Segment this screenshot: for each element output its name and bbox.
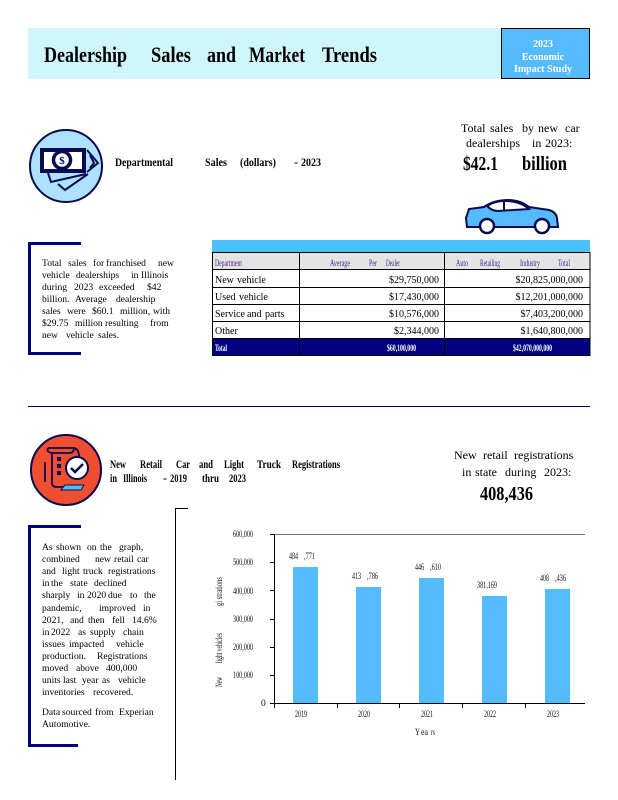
text: sales summary: Total (42, 258, 62, 269)
heading: registrations: New (110, 457, 126, 471)
text: registrations summary: retail (114, 554, 134, 565)
table rows: $2,344,000 (394, 326, 439, 337)
table header: Industry (520, 258, 540, 268)
heading: departmental sales: Sales (205, 155, 227, 169)
badge: 2023 Economic Impact Study (502, 28, 590, 78)
x axis labels: 2019 (295, 710, 307, 720)
x axis title: rs (431, 728, 435, 738)
y axis title: New (215, 677, 225, 687)
text: sales summary: exceeded (99, 282, 135, 293)
text: sales summary: vehicle (42, 270, 70, 281)
data labels: 484 (289, 552, 298, 562)
data labels: ,786 (367, 572, 378, 582)
table total row: Total (215, 343, 227, 353)
callout: new retail registrations (454, 448, 574, 505)
text: sales summary: billion. (42, 294, 69, 305)
text: sales summary: dealership (116, 294, 156, 305)
y axis title (215, 577, 225, 687)
text: registrations summary: impacted (69, 639, 104, 650)
data labels: 413 (352, 572, 361, 582)
text: registrations summary: chain (123, 627, 144, 638)
text: registrations summary: recovered. (93, 687, 133, 698)
table rows: Used (215, 292, 236, 303)
x axis title (415, 728, 435, 738)
text: registrations summary: on (87, 542, 97, 553)
y axis labels: 500,000 (233, 558, 253, 568)
header band (28, 28, 501, 79)
heading: registrations (110, 457, 340, 485)
title: Trends (322, 42, 377, 67)
text: sales summary: sales (68, 258, 87, 269)
table rows: $29,750,000 (389, 275, 439, 286)
callout: total sales: in (532, 136, 541, 150)
text: registrations summary: due (108, 590, 122, 601)
table total row: $42,070,000,000 (513, 343, 552, 353)
heading: departmental sales: - (294, 155, 298, 169)
text: registrations summary: improved (99, 603, 136, 614)
text: registrations summary: new (95, 554, 111, 565)
text: sales summary: Illinois (141, 270, 168, 281)
text: sales summary: $60.1 (92, 306, 114, 317)
text: registrations summary: Experian (119, 707, 154, 718)
text: registrations summary: fell (112, 615, 125, 626)
text: registrations summary: in (42, 627, 50, 638)
text: registrations summary: pandemic, (42, 603, 82, 614)
text: registrations summary: inventories (42, 687, 85, 698)
text: sales summary: million (75, 318, 103, 329)
callout: total sales: 2023: (545, 136, 572, 150)
data labels: ,436 (555, 574, 566, 584)
bracket: sales text (30, 244, 81, 354)
text: registrations summary: 2022 (51, 627, 70, 638)
heading: registrations: Retail (140, 457, 162, 471)
table header: Retailing (480, 258, 500, 268)
table rows: New (215, 275, 235, 286)
y axis labels: 400,000 (233, 587, 253, 597)
icon: registration document (31, 435, 101, 505)
text: sales summary: for (93, 258, 105, 269)
table rows: parts (265, 309, 285, 320)
badge: 2023 Economic Impact Study: Economic (522, 52, 565, 63)
y axis labels: 600,000 (233, 530, 253, 540)
text: sales summary: franchised (106, 258, 146, 269)
text: sales summary: sales (42, 306, 61, 317)
table rows (215, 275, 583, 337)
icon: money: $ (59, 155, 65, 167)
heading: registrations: Registrations (292, 457, 340, 471)
bracket: registrations text (30, 526, 81, 746)
text: registrations summary: in (143, 603, 151, 614)
data labels: 446 (415, 563, 424, 573)
callout: total sales: $42.1 (463, 153, 498, 175)
table total row: $60,100,000 (387, 343, 416, 353)
text: registrations summary: Data (42, 707, 61, 718)
callout: new retail registrations: registrations (514, 448, 574, 462)
text: registrations summary: 400,000 (106, 663, 137, 674)
text: registrations summary: issues (42, 639, 65, 650)
text: registrations summary: Registrations (97, 651, 148, 662)
text: registrations summary: As (42, 542, 53, 553)
text: registrations summary: truck (83, 566, 103, 577)
callout: total sales: sales (490, 121, 514, 135)
table rows: vehicle (239, 292, 268, 303)
text: sales summary: Average (75, 294, 107, 305)
text: registrations summary: then (88, 615, 105, 626)
text: registrations summary: declined (94, 578, 127, 589)
text: registrations summary: above (76, 663, 99, 674)
text: registrations summary: supply (90, 627, 116, 638)
text: registrations summary: production. (42, 651, 86, 662)
text: registrations summary: the (100, 542, 112, 553)
callout: total sales: by (522, 121, 534, 135)
text: registrations summary: sharply (42, 590, 70, 601)
heading: departmental sales: 2023 (301, 155, 321, 169)
y axis title: light vehicles (215, 633, 225, 663)
table header: Auto (456, 258, 468, 268)
text: sales summary: resulting (105, 318, 139, 329)
text: registrations summary: the (51, 578, 63, 589)
title: and (207, 42, 236, 67)
table rows: $20,825,000,000 (516, 275, 583, 286)
title (44, 42, 377, 67)
callout: new retail registrations: state (475, 465, 497, 479)
data labels: ,610 (430, 563, 441, 573)
text: registrations summary: units (42, 675, 61, 686)
text: sales summary: dealerships (76, 270, 119, 281)
heading: departmental sales (115, 155, 321, 169)
text: sales summary: from (150, 318, 169, 329)
y axis labels: 0 (261, 699, 266, 709)
text: registrations summary: light (62, 566, 80, 577)
text: registrations summary: 2021, (42, 615, 64, 626)
callout: total sales: Total (461, 121, 486, 135)
icon: money (30, 130, 102, 202)
text: registrations summary: 2020 (87, 590, 106, 601)
text: registrations summary: registrations (108, 566, 156, 577)
text: sales summary: vehicle (66, 330, 94, 341)
heading: registrations: Illinois (123, 471, 147, 485)
text: registrations summary: in (42, 578, 50, 589)
callout: total sales: car (565, 121, 580, 135)
callout: total sales (461, 121, 580, 175)
text: sales summary: in (131, 270, 139, 281)
title: Market (249, 42, 306, 67)
table: departmental sales (212, 240, 590, 356)
table rows: $10,576,000 (389, 309, 439, 320)
text: registrations summary: year (82, 675, 99, 686)
text: registrations summary: 14.6% (132, 615, 157, 626)
x axis labels: 2022 (484, 710, 496, 720)
text: sales summary: $42 (147, 282, 162, 293)
x axis labels: 2021 (421, 710, 433, 720)
table rows: $17,430,000 (389, 292, 439, 303)
x axis title: Y (415, 728, 420, 738)
text: sales summary (42, 258, 174, 341)
x axis title: ea (421, 728, 429, 738)
heading: registrations: Car (176, 457, 190, 471)
text: registrations summary: car (137, 554, 150, 565)
text: registrations summary: state (70, 578, 88, 589)
table rows: $1,640,800,000 (520, 326, 583, 337)
title: Sales (151, 42, 191, 67)
table total row (215, 343, 552, 353)
y axis labels: 100,000 (233, 671, 253, 681)
heading: registrations: in (110, 471, 117, 485)
icon: car (466, 200, 558, 233)
callout: total sales: new (538, 121, 558, 135)
table header: Average (330, 258, 350, 268)
text: registrations summary: from (95, 707, 114, 718)
text: registrations summary: sourced (62, 707, 92, 718)
text: sales summary: during (42, 282, 67, 293)
text: sales summary: sales. (98, 330, 119, 341)
x axis labels (295, 710, 559, 720)
data labels: 408 (540, 574, 549, 584)
y axis labels: 300,000 (233, 615, 253, 625)
callout: new retail registrations: during (505, 465, 536, 479)
callout: total sales: billion (522, 153, 567, 175)
x axis labels: 2020 (358, 710, 370, 720)
table header: Total (558, 258, 570, 268)
table rows: vehicle (237, 275, 266, 286)
heading: registrations: thru (202, 471, 219, 485)
text: sales summary: 2023 (74, 282, 93, 293)
table header: Department (215, 258, 242, 268)
text: registrations summary: last (63, 675, 77, 686)
callout: new retail registrations: retail (483, 448, 508, 462)
table header: Per (369, 258, 377, 268)
x axis labels: 2023 (547, 710, 559, 720)
callout: new retail registrations: 2023: (544, 465, 571, 479)
heading: departmental sales: (dollars) (240, 155, 276, 169)
table rows: Service (215, 309, 246, 320)
badge: 2023 Economic Impact Study: 2023 (533, 39, 553, 50)
text: registrations summary: to (130, 590, 138, 601)
text: registrations summary: moved (42, 663, 68, 674)
data labels: ,771 (304, 552, 315, 562)
text: registrations summary (42, 542, 157, 730)
heading: registrations: Light (224, 457, 244, 471)
text: registrations summary: combined (42, 554, 80, 565)
text: registrations summary: as (102, 675, 110, 686)
text: registrations summary: as (78, 627, 86, 638)
text: registrations summary: vehicle (116, 639, 144, 650)
callout: new retail registrations: New (454, 448, 477, 462)
text: registrations summary: shown (56, 542, 81, 553)
text: sales summary: new (158, 258, 174, 269)
table rows: $7,403,200,000 (520, 309, 583, 320)
title: Dealership (44, 42, 127, 67)
text: sales summary: million, (120, 306, 150, 317)
text: sales summary: $29.75 (42, 318, 69, 329)
badge: 2023 Economic Impact Study: Impact Study (514, 64, 572, 75)
data labels: 381,169 (477, 581, 497, 591)
heading: registrations: - (163, 471, 167, 485)
text: registrations summary: and (42, 566, 56, 577)
table rows: and (247, 309, 261, 320)
heading: registrations: Truck (257, 457, 281, 471)
text: registrations summary: and (70, 615, 84, 626)
data labels (289, 552, 566, 591)
bars (293, 567, 570, 703)
heading: registrations: and (199, 457, 213, 471)
text: sales summary: were (67, 306, 86, 317)
bar chart (215, 530, 585, 738)
vertical divider (176, 508, 188, 780)
text: registrations summary: in (77, 590, 85, 601)
text: registrations summary: Automotive. (42, 719, 90, 730)
text: registrations summary: graph, (119, 542, 143, 553)
table header: Dealer (386, 258, 400, 268)
callout: new retail registrations: in (462, 465, 471, 479)
text: sales summary: new (42, 330, 58, 341)
callout: new retail registrations: 408,436 (480, 483, 533, 505)
callout: total sales: dealerships (466, 136, 520, 150)
heading: departmental sales: Departmental (115, 155, 174, 169)
y axis title: gi strations (215, 577, 225, 606)
heading: registrations: 2023 (229, 471, 246, 485)
y axis labels: 200,000 (233, 643, 253, 653)
table rows: Other (215, 326, 238, 337)
table header (215, 258, 570, 268)
table rows: $12,201,000,000 (516, 292, 583, 303)
heading: registrations: 2019 (170, 471, 187, 485)
text: sales summary: with (153, 306, 170, 317)
y axis labels (233, 530, 266, 709)
text: registrations summary: vehicle (118, 675, 146, 686)
text: registrations summary: the (144, 590, 156, 601)
